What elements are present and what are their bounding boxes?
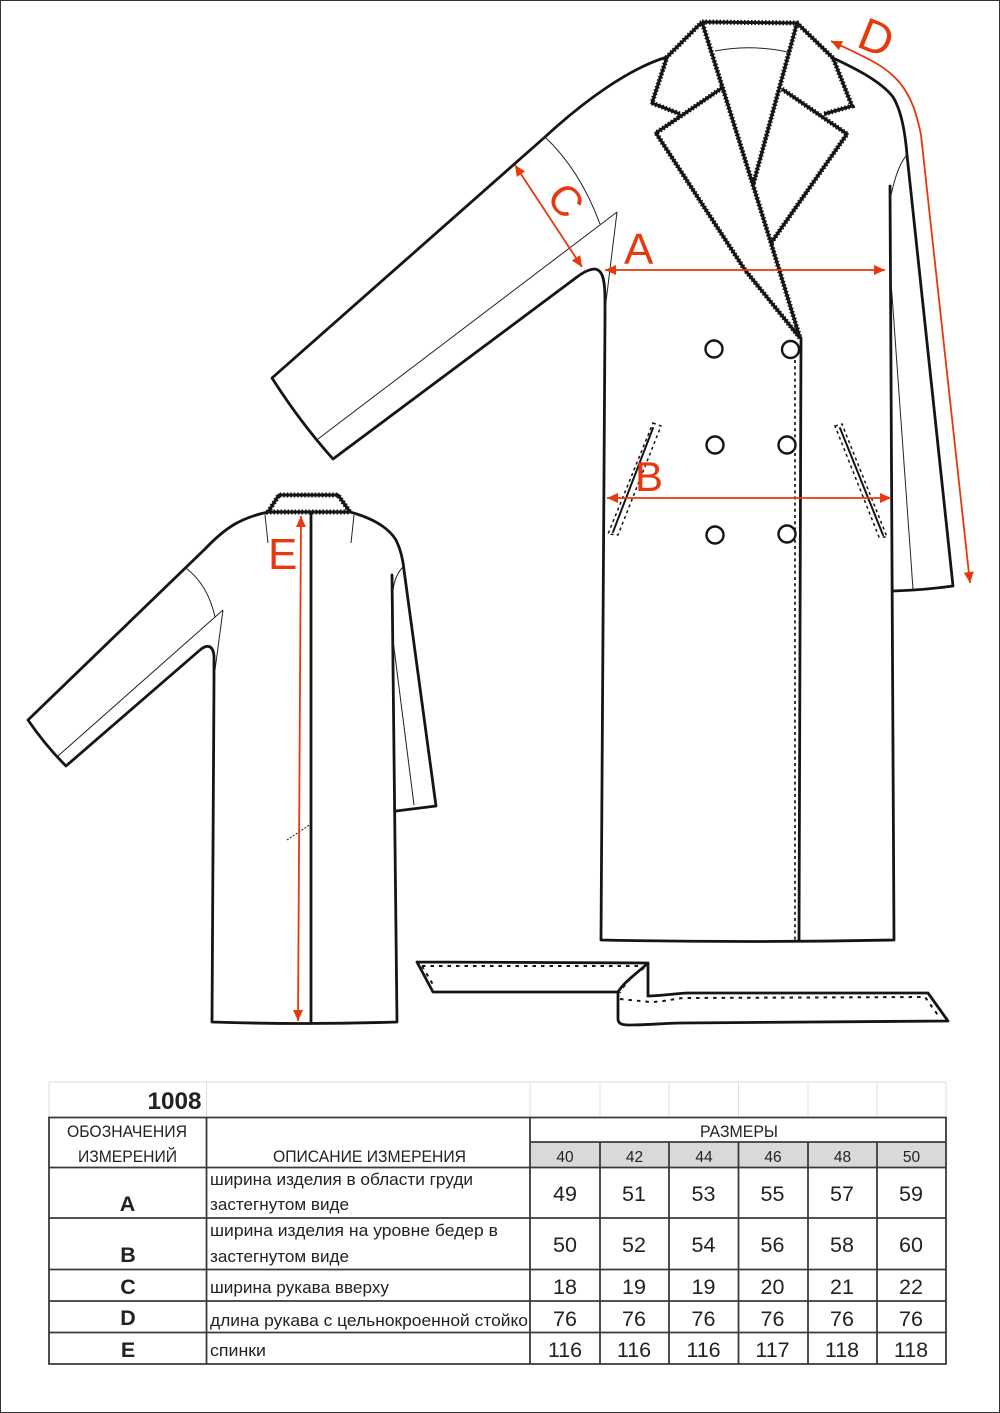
column headings <box>67 1122 778 1166</box>
back view of coat <box>28 495 436 1024</box>
row E: 116 <box>686 1338 721 1362</box>
row C: 22 <box>899 1275 923 1299</box>
arrow A <box>605 269 885 271</box>
size labels: 42 <box>626 1149 643 1166</box>
row E: 116 <box>548 1338 582 1362</box>
row D: 76 <box>899 1307 923 1331</box>
table grid <box>49 1118 946 1364</box>
model number: 1008 <box>148 1088 202 1115</box>
size labels: 40 <box>556 1149 574 1166</box>
label E: E <box>268 530 297 579</box>
row B: 52 <box>622 1233 646 1257</box>
row A: 55 <box>761 1182 784 1206</box>
belt stitching <box>422 966 940 1018</box>
column headings: ОБОЗНАЧЕНИЯ <box>67 1122 187 1141</box>
back vent mark <box>287 824 311 840</box>
row B: 56 <box>761 1233 784 1257</box>
row D: 76 <box>830 1307 854 1331</box>
row C <box>120 1275 923 1299</box>
right sleeve outline <box>833 58 953 591</box>
back construction lines <box>58 515 414 805</box>
buttons <box>706 340 799 544</box>
size labels: 48 <box>834 1149 851 1166</box>
row B: 58 <box>830 1233 854 1257</box>
row E: 117 <box>755 1338 790 1362</box>
row A: A <box>120 1192 135 1216</box>
belt left piece <box>417 962 648 996</box>
arrow E <box>298 516 301 1021</box>
size labels: 50 <box>903 1149 920 1166</box>
column headings: ОПИСАНИЕ ИЗМЕРЕНИЯ <box>273 1147 466 1166</box>
row D: 76 <box>553 1307 577 1331</box>
row C: 21 <box>830 1275 854 1299</box>
arrow D <box>831 41 970 583</box>
row A: 59 <box>899 1182 923 1206</box>
belt <box>417 962 948 1025</box>
row D: 76 <box>622 1307 646 1331</box>
row C: 19 <box>622 1275 646 1299</box>
measurement arrows <box>268 7 970 1021</box>
row C: 18 <box>553 1275 577 1299</box>
row A: 57 <box>830 1182 854 1206</box>
row B <box>120 1222 923 1267</box>
left pocket <box>608 423 661 535</box>
row B: 50 <box>553 1233 577 1257</box>
row E: 116 <box>617 1338 651 1362</box>
label C: C <box>538 174 594 227</box>
size labels <box>556 1149 920 1166</box>
row A <box>120 1171 923 1216</box>
row A: застегнутом виде <box>210 1196 349 1214</box>
row A: 49 <box>553 1182 577 1206</box>
row D: 76 <box>761 1307 784 1331</box>
row E: спинки <box>210 1342 266 1360</box>
back right sleeve outline <box>350 512 436 811</box>
collar and lapels with textured edge <box>652 22 852 338</box>
row E: E <box>121 1338 135 1362</box>
grey size header background <box>530 1142 946 1168</box>
belt right piece <box>618 992 948 1025</box>
row B: 60 <box>899 1233 923 1257</box>
row D: длина рукава с цельнокроенной стойко <box>210 1312 528 1330</box>
row C: 20 <box>761 1275 784 1299</box>
neckline <box>715 48 788 52</box>
arrow C <box>515 165 582 267</box>
row A: 51 <box>622 1182 646 1206</box>
front view of coat <box>272 22 953 942</box>
label B: B <box>635 453 663 500</box>
row E <box>121 1338 928 1362</box>
label A: A <box>624 225 654 274</box>
arrow B <box>607 497 891 499</box>
centre front edge and stitching <box>795 338 801 940</box>
row B: застегнутом виде <box>210 1248 349 1266</box>
row C: 19 <box>692 1275 715 1299</box>
size table <box>49 1082 946 1364</box>
row B: 54 <box>692 1233 715 1257</box>
back body and left sleeve outline <box>28 512 397 1024</box>
column headings: РАЗМЕРЫ <box>700 1122 778 1141</box>
row E: 118 <box>894 1338 928 1362</box>
column headings: ИЗМЕРЕНИЙ <box>78 1147 177 1166</box>
row E: 118 <box>825 1338 859 1362</box>
right pocket <box>835 424 887 537</box>
label D: D <box>851 7 902 68</box>
row D <box>120 1306 923 1331</box>
front body and left sleeve outline <box>272 57 894 942</box>
row D: D <box>120 1306 136 1330</box>
sleeve construction lines <box>318 137 913 589</box>
back collar with textured edge <box>268 495 350 512</box>
row B: B <box>120 1243 136 1267</box>
row A: 53 <box>692 1182 715 1206</box>
light top row grid <box>49 1082 946 1117</box>
row B: ширина изделия на уровне бедер в <box>210 1222 498 1240</box>
size labels: 44 <box>695 1149 713 1166</box>
row A: ширина изделия в области груди <box>210 1171 473 1189</box>
row C: C <box>120 1275 136 1299</box>
size labels: 46 <box>764 1149 782 1166</box>
row C: ширина рукава вверху <box>210 1279 390 1297</box>
row D: 76 <box>692 1307 715 1331</box>
back centre seam <box>310 514 312 1023</box>
